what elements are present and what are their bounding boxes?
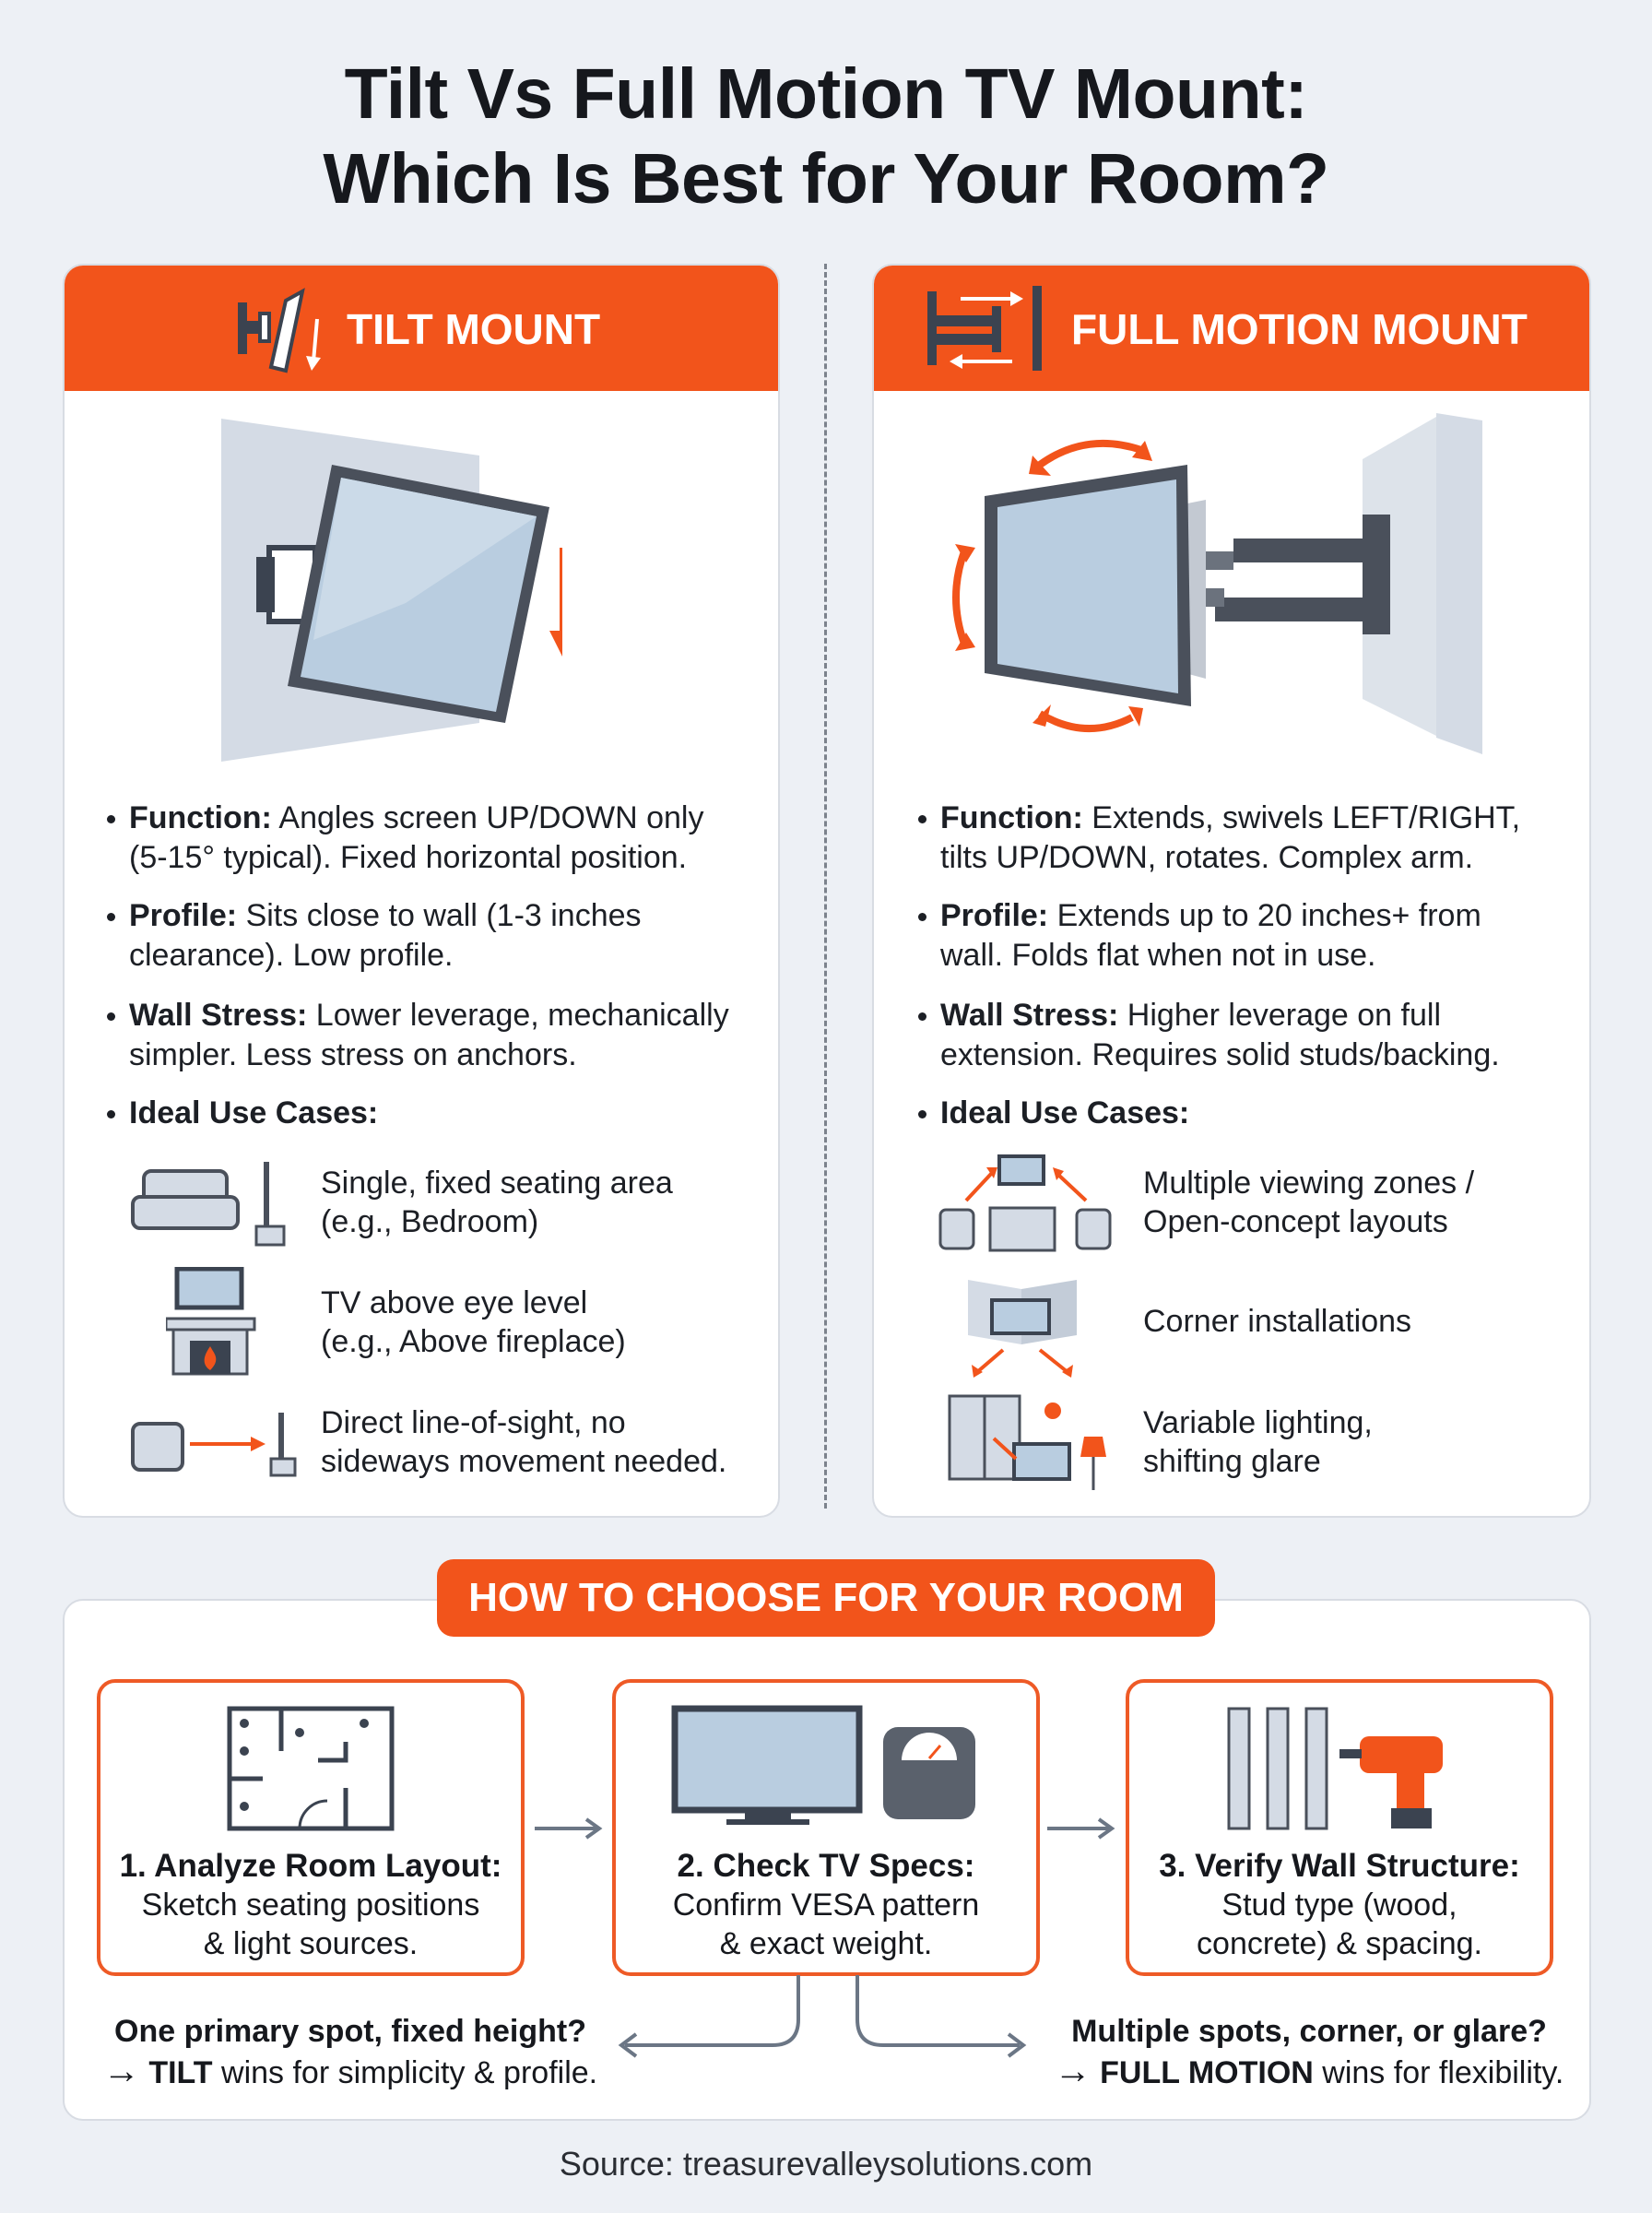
- text: step 3: [1159, 1848, 1520, 1961]
- icon: studs and drill: [1228, 1708, 1443, 1829]
- title: Tilt Vs Full Motion TV Mount:: [345, 54, 1307, 134]
- text: step 1: Sketch seating positions: [142, 1888, 479, 1923]
- icon: line of sight: [131, 1413, 297, 1477]
- panel: full motion mount: [872, 264, 1591, 1518]
- bullet: profile: Profile: Extends up to 20 inches+ from: [940, 898, 1481, 933]
- text: lighting: shifting glare: [1143, 1444, 1321, 1479]
- text: step 1: 1. Analyze Room Layout:: [120, 1848, 502, 1884]
- text: above eye level: TV above eye level: [321, 1285, 587, 1320]
- bullet: function: [129, 799, 703, 878]
- text: step 1: & light sources.: [204, 1926, 418, 1961]
- icon: fireplace: [166, 1267, 256, 1376]
- text: above eye level: (e.g., Above fireplace): [321, 1324, 626, 1359]
- divider: [824, 264, 827, 1509]
- arrow 1: [535, 1817, 603, 1840]
- heading: tilt mount: TILT MOUNT: [347, 305, 600, 353]
- icon: sofa: [131, 1162, 286, 1247]
- heading: how to choose: HOW TO CHOOSE FOR YOUR ROOM: [468, 1575, 1184, 1620]
- text: single seating: [321, 1166, 673, 1239]
- text: direct line: Direct line-of-sight, no: [321, 1405, 626, 1440]
- bullet: ideal use: Ideal Use Cases:: [940, 1095, 1189, 1130]
- text: step 1: [120, 1848, 502, 1961]
- icon: TV and scale: [671, 1706, 975, 1825]
- panel: tilt mount: [63, 264, 780, 1518]
- source: Source: treasurevalleysolutions.com: [560, 2145, 1092, 2183]
- heading: full motion: FULL MOTION MOUNT: [1071, 305, 1528, 353]
- heading: how to choose: [437, 1559, 1215, 1637]
- bullet: function: tilts UP/DOWN, rotates. Complex arm.: [940, 840, 1473, 875]
- illustration: full motion TV: [952, 413, 1482, 754]
- text: tilt verdict: One primary spot, fixed height?: [114, 2014, 586, 2049]
- text: direct line: [321, 1405, 726, 1479]
- text: step 2: & exact weight.: [720, 1926, 932, 1961]
- text: lighting: Variable lighting,: [1143, 1405, 1373, 1440]
- text: multiple zones: Open-concept layouts: [1143, 1204, 1448, 1239]
- bullet: wall stress: [940, 996, 1500, 1075]
- bullet: wall stress: Wall Stress: Lower leverage, mechanically: [129, 998, 729, 1033]
- heading: full motion: [874, 266, 1589, 391]
- bullet: profile: wall. Folds flat when not in use.: [940, 938, 1375, 973]
- title: Which Is Best for Your Room?: [323, 139, 1329, 219]
- bullet: function: (5-15° typical). Fixed horizontal position.: [129, 840, 687, 875]
- icon: floor plan: [227, 1706, 395, 1831]
- bullet: profile: clearance). Low profile.: [129, 938, 454, 973]
- text: step 2: 2. Check TV Specs:: [678, 1848, 974, 1884]
- step 2: [612, 1679, 1040, 1976]
- arrow 2: [1047, 1817, 1115, 1840]
- text: tilt verdict: → TILT wins for simplicity & profile.: [103, 2051, 597, 2091]
- text: corner: Corner installations: [1143, 1304, 1411, 1339]
- icon: corner: [968, 1280, 1077, 1378]
- bullet: function: Function: Extends, swivels LEFT/RIGHT,: [940, 800, 1520, 835]
- step 1: [97, 1679, 525, 1976]
- text: lighting: [1143, 1405, 1373, 1479]
- step 3: [1126, 1679, 1553, 1976]
- icon: open concept: [938, 1154, 1112, 1252]
- bullet: function: [940, 799, 1520, 878]
- bullet: function: Function: Angles screen UP/DOWN only: [129, 800, 703, 835]
- title: [323, 54, 1329, 219]
- text: full motion verdict: → FULL MOTION wins for flexibility.: [1055, 2051, 1564, 2091]
- text: single seating: (e.g., Bedroom): [321, 1204, 538, 1239]
- bullet: profile: [940, 896, 1481, 976]
- text: step 3: concrete) & spacing.: [1197, 1926, 1482, 1961]
- text: step 3: Stud type (wood,: [1221, 1888, 1457, 1923]
- text: multiple zones: Multiple viewing zones /: [1143, 1166, 1474, 1201]
- bullet: profile: Profile: Sits close to wall (1-3 inches: [129, 898, 642, 933]
- bullet: wall stress: extension. Requires solid studs/backing.: [940, 1037, 1500, 1072]
- text: direct line: sideways movement needed.: [321, 1444, 726, 1479]
- bullet: wall stress: [129, 996, 729, 1075]
- text: step 2: Confirm VESA pattern: [673, 1888, 979, 1923]
- bullet: ideal use: Ideal Use Cases:: [129, 1095, 378, 1130]
- text: full motion verdict: [1055, 2014, 1564, 2091]
- bullet: profile: [129, 896, 642, 976]
- text: step 3: 3. Verify Wall Structure:: [1159, 1848, 1520, 1884]
- text: single seating: Single, fixed seating area: [321, 1166, 673, 1201]
- connector arrows: [618, 1975, 1027, 2058]
- illustration: tilt TV: [221, 419, 562, 762]
- text: multiple zones: [1143, 1166, 1474, 1239]
- heading: tilt mount: [65, 266, 778, 391]
- icon: lighting glare: [948, 1394, 1106, 1490]
- text: tilt verdict: [103, 2014, 597, 2091]
- text: full motion verdict: Multiple spots, corner, or glare?: [1071, 2014, 1547, 2049]
- bullet: wall stress: Wall Stress: Higher leverage on full: [940, 998, 1441, 1033]
- panel: how to choose: [63, 1599, 1591, 2121]
- text: step 2: [673, 1848, 979, 1961]
- bullet: wall stress: simpler. Less stress on anchors.: [129, 1037, 577, 1072]
- text: above eye level: [321, 1285, 626, 1359]
